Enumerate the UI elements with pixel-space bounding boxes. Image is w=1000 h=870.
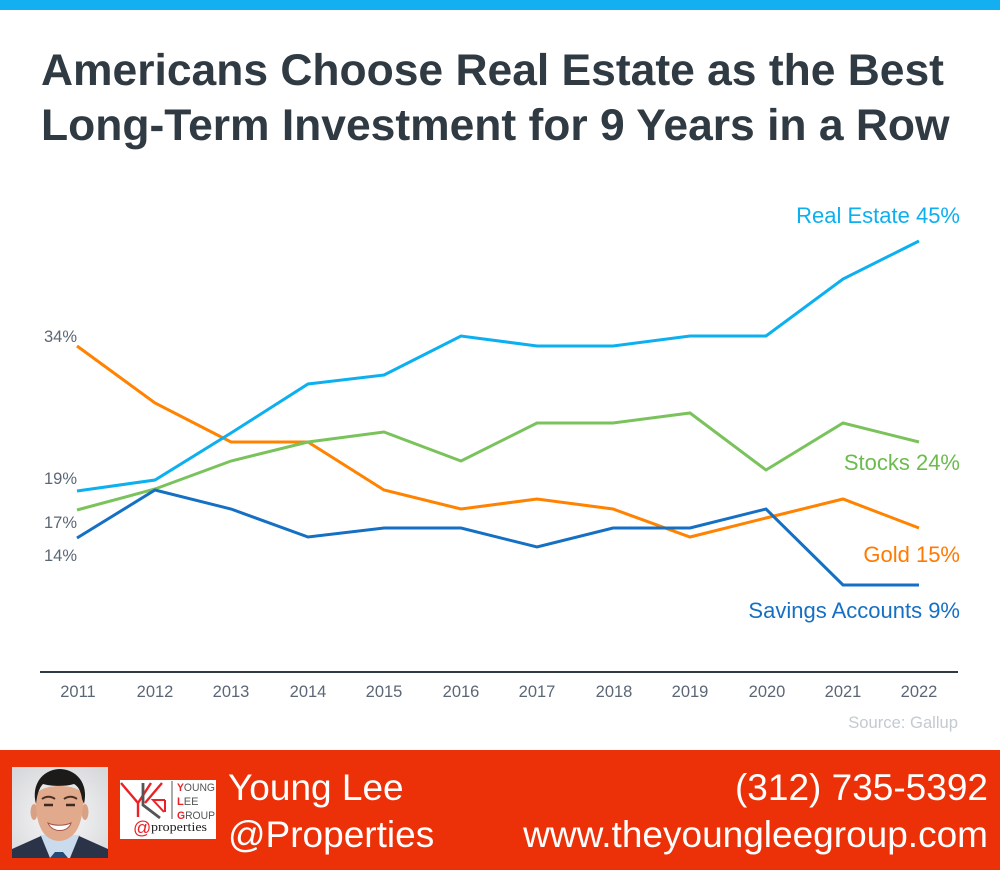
contact phone and website: www.theyoungleegroup.com	[523, 814, 988, 854]
source note: Source: Gallup	[848, 713, 958, 732]
x axis year labels: 2013	[213, 683, 249, 701]
x axis year labels: 2021	[825, 683, 861, 701]
x axis year labels: 2012	[137, 683, 173, 701]
label: savings accounts: Savings Accounts 9%	[748, 598, 960, 623]
starting value labels: 17%	[44, 514, 77, 532]
starting value labels: 34%	[44, 328, 77, 346]
logo: Young Lee Group @properties	[120, 780, 216, 839]
starting value labels	[44, 328, 77, 565]
title: Long-Term Investment for 9 Years in a Row	[41, 100, 950, 150]
logo: Young Lee Group @properties: properties	[151, 819, 207, 834]
agent name and company	[228, 767, 434, 854]
x axis year labels	[60, 683, 937, 701]
title	[41, 46, 950, 150]
agent photo	[12, 767, 108, 858]
agent name and company: @Properties	[228, 814, 434, 854]
footer band	[0, 750, 1000, 870]
label: real estate: Real Estate 45%	[796, 203, 960, 228]
x axis year labels: 2022	[901, 683, 937, 701]
logo: Young Lee Group @properties: @	[133, 818, 151, 838]
series: real estate line	[77, 241, 919, 491]
x axis year labels: 2020	[749, 683, 785, 701]
label: stocks: Stocks 24%	[844, 450, 960, 475]
series: gold line	[77, 346, 919, 537]
series: stocks line	[77, 413, 919, 510]
x axis line	[40, 671, 958, 673]
x axis year labels: 2019	[672, 683, 708, 701]
x axis year labels: 2016	[443, 683, 479, 701]
label: gold: Gold 15%	[863, 542, 960, 567]
x axis year labels: 2011	[60, 683, 96, 701]
series: savings accounts line	[77, 490, 919, 585]
contact phone and website: (312) 735-5392	[735, 767, 988, 808]
starting value labels: 19%	[44, 470, 77, 488]
agent name and company: Young Lee	[228, 767, 404, 808]
x axis year labels: 2015	[366, 683, 402, 701]
x axis year labels: 2018	[596, 683, 632, 701]
title: Americans Choose Real Estate as the Best	[41, 46, 944, 95]
logo: Young Lee Group @properties: YOUNG	[177, 782, 215, 794]
contact phone and website	[523, 767, 988, 854]
x axis year labels: 2017	[519, 683, 555, 701]
top accent bar	[0, 0, 1000, 10]
logo: Young Lee Group @properties: LEE	[177, 796, 198, 808]
logo: Young Lee Group @properties: GROUP	[177, 810, 215, 822]
starting value labels: 14%	[44, 547, 77, 565]
x axis year labels: 2014	[290, 683, 326, 701]
